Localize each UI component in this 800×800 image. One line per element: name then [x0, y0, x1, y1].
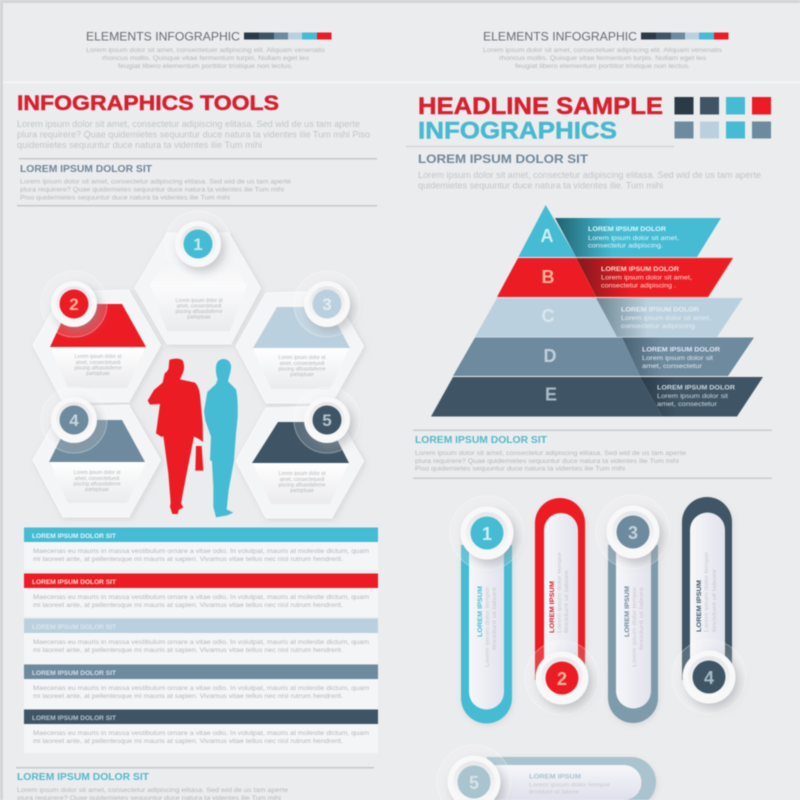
table row 2: Maecenas eu mauris in massa vestibulum ornare a vitae odio. In volutpat, mauris at molestie dictum, quam [33, 594, 369, 601]
intro paragraph left: quidemietes sequuntur duce natura ta videntes ilie Tum mihi [17, 140, 262, 150]
section: bottom left [16, 767, 374, 800]
hexagon 3: piscing alfsasdaferne [279, 366, 326, 372]
tier D [453, 338, 640, 376]
pill 2: Lorem ipsum dolor tempor [557, 552, 563, 633]
header separator [3, 82, 800, 83]
tier D: D [544, 346, 556, 366]
headline right: HEADLINE SAMPLE [418, 93, 663, 120]
hexagon 5: Lorem ipsum dolor at [279, 471, 326, 477]
left header: ELEMENTS INFOGRAPHIC [86, 30, 240, 44]
pill 3: tincidunt ut labore [639, 587, 645, 650]
pill 3: 3 [628, 523, 638, 543]
table row 3: mi laoreet ante, at pellentesque mi mauris at sapien. Vivamus vitae tellus nec nisl rutrum hendrerit. [33, 647, 343, 654]
pill 4 [672, 497, 746, 714]
pill 1: tincidunt ut labore [492, 587, 498, 650]
hexagon 2: partsptuae [86, 371, 110, 377]
hexagon 5: amet, consectetuedi [280, 477, 324, 483]
ribbon D: Lorem ipsum dolor sit [642, 355, 713, 362]
hexagon 4: Lorem ipsum dolor at [74, 470, 121, 476]
pill 4: Lorem ipsum dolor tempor [704, 552, 710, 632]
table row 1: mi laoreet ante, at pellentesque mi mauris at sapien. Vivamus vitae tellus nec nisl rutrum hendrerit. [33, 556, 343, 563]
pill 1 [450, 496, 524, 724]
hexagon 1: partsptuae [187, 314, 211, 320]
colour swatches [674, 97, 771, 138]
tier B [497, 258, 596, 297]
hexagon 5: partsptuae [290, 488, 314, 494]
hexagon 4 [33, 405, 162, 517]
hexagon 1: piscing alfsasdaferne [176, 309, 223, 315]
table row 5: mi laoreet ante, at pellentesque mi mauris at sapien. Vivamus vitae tellus nec nisl rutrum hendrerit. [33, 738, 343, 745]
section: pyramid caption: plura requirere? Quae quidemietes sequuntur duce natura ta videntes ilie Tum mihi [415, 458, 680, 465]
hexagon 4: piscing alfsasdaferne [74, 482, 121, 488]
figure: red man with briefcase [148, 359, 203, 514]
section: intro right: LOREM IPSUM DOLOR SIT [418, 152, 589, 166]
section: lorem ipsum left: Lorem ipsum dolor sit amet, consectetur adipiscing elitasa. Sed wid de us tam aperte [20, 178, 291, 186]
table row 4: LOREM IPSUM DOLOR SIT [32, 670, 116, 677]
ribbon D: LOREM IPSUM DOLOR [642, 346, 720, 354]
tier C [475, 298, 617, 337]
pill 2: LOREM IPSUM [549, 581, 556, 633]
pill 1: Lorem ipsum dolor tempor [485, 587, 491, 667]
badge 2 [41, 271, 107, 337]
ribbon A [555, 218, 721, 257]
table row 1: Maecenas eu mauris in massa vestibulum ornare a vitae odio. In volutpat, mauris at molestie dictum, quam [33, 548, 369, 555]
section: bottom left: LOREM IPSUM DOLOR SIT [17, 772, 149, 783]
right header: ELEMENTS INFOGRAPHIC [483, 30, 637, 44]
left header [86, 30, 332, 70]
hexagon 3: Lorem ipsum dolor at [279, 355, 326, 361]
pill 2: tincidunt ut labore [564, 570, 570, 633]
tier E [431, 377, 662, 416]
ribbon A: LOREM IPSUM DOLOR [588, 226, 666, 233]
table row 5: LOREM IPSUM DOLOR SIT [32, 715, 116, 722]
ribbon D [622, 338, 754, 376]
pill 5: Lorem ipsum dolor tempor [529, 782, 610, 788]
table row 2 [24, 574, 378, 609]
section: pyramid caption: Piso quidemietes sequuntur duce natura ta videntes ilie Tum mihi [415, 466, 626, 472]
badge 5: 5 [322, 411, 332, 430]
headline right: INFOGRAPHICS [418, 118, 617, 144]
table row 4: mi laoreet ante, at pellentesque mi mauris at sapien. Vivamus vitae tellus nec nisl rutrum hendrerit. [33, 693, 343, 700]
tier C: C [542, 306, 554, 326]
table panel backgrounds [24, 542, 378, 753]
table row 1: LOREM IPSUM DOLOR SIT [32, 533, 116, 540]
tier A: A [540, 226, 554, 246]
hexagon 1 [135, 233, 262, 344]
ribbon E: Lorem ipsum dolor sit [657, 393, 728, 400]
tier A [518, 205, 576, 257]
pill 4: LOREM IPSUM [696, 580, 703, 632]
hexagon 5 [236, 406, 365, 518]
pill 1: 1 [482, 524, 492, 544]
hexagon 3 [236, 291, 365, 403]
section: lorem ipsum left: LOREM IPSUM DOLOR SIT [20, 164, 152, 175]
pill 4: 4 [704, 668, 714, 688]
pill 3: Lorem ipsum dolor tempor [632, 587, 638, 667]
pyramid [431, 205, 763, 416]
section: bottom left: Lorem ipsum dolor sit amet, consectetur adipiscing elitasa. Sed wid de us tam aperte [17, 787, 288, 794]
pill 2: 2 [557, 669, 567, 689]
badge 3: 3 [322, 295, 332, 314]
badge 1: 1 [193, 235, 203, 254]
ribbon B: Lorem ipsum dolor sit amet, [601, 274, 692, 282]
ribbon A: Lorem ipsum dolor sit amet, [588, 235, 679, 242]
right header: feugiat libero elementum porttitor tristique non lectus. [515, 63, 690, 70]
badge 3 [294, 271, 360, 337]
intro paragraph left [17, 119, 370, 150]
section: intro right: quidemietes sequuntur duce natura ta videntes ilie. Tum mihi [418, 180, 663, 190]
section: intro right [406, 146, 761, 190]
section: lorem ipsum left: Piso quidemietes sequuntur duce natura ta videntes ilie Tum mihi [20, 194, 231, 202]
ribbon C: Lorem ipsum dolor sit amet, [621, 315, 711, 322]
ribbon B: consectetur adipiscing . [601, 282, 676, 290]
pill 5: tincidunt ut labore [529, 790, 579, 796]
ribbon B [576, 258, 733, 297]
table row 2: mi laoreet ante, at pellentesque mi mauris at sapien. Vivamus vitae tellus nec nisl rutrum hendrerit. [33, 602, 343, 609]
hexagon 2: piscing alfsasdaferne [75, 366, 122, 372]
table row 3: LOREM IPSUM DOLOR SIT [32, 624, 116, 631]
hexagon 1: Lorem ipsum dolor at [176, 298, 223, 304]
right header: rhoncus mollis. Quisque vitae fermentum turpis. Nullam eget leo [499, 55, 707, 62]
section: pyramid caption: LOREM IPSUM DOLOR SIT [415, 435, 547, 446]
pill 5 [437, 745, 656, 800]
badge 4: 4 [69, 411, 79, 430]
ribbon D: amet, consectetur [642, 363, 703, 370]
ribbon E [640, 377, 763, 416]
pill 5: 5 [469, 773, 479, 793]
section: pyramid caption: Lorem ipsum dolor sit amet, consectetur adipiscing elitasa. Sed wid de us tam aperte [415, 450, 686, 457]
right header: Lorem ipsum dolor sit amet, consectetuer adipiscing elit. Aliquam venenatis [483, 47, 722, 54]
pill 3: LOREM IPSUM [624, 586, 631, 637]
tier E: E [545, 384, 557, 404]
table row 5: Maecenas eu mauris in massa vestibulum ornare a vitae odio. In volutpat, mauris at molestie dictum, quam [33, 730, 369, 737]
ribbon C: LOREM IPSUM DOLOR [621, 306, 699, 314]
badge 5 [294, 387, 360, 453]
table row 5 [24, 710, 378, 745]
ribbon B: LOREM IPSUM DOLOR [601, 266, 679, 273]
badge 1 [165, 211, 231, 277]
table row 3: Maecenas eu mauris in massa vestibulum ornare a vitae odio. In volutpat, mauris at molestie dictum, quam [33, 639, 369, 646]
intro paragraph left: Lorem ipsum dolor sit amet, consectetur adipiscing elitasa. Sed wid de us tam aperte [17, 119, 360, 129]
pill 1: LOREM IPSUM [477, 586, 484, 637]
hexagon 2: amet, consectetuedi [76, 360, 120, 366]
left header: Lorem ipsum dolor sit amet, consectetuer adipiscing elit. Aliquam venenatis [86, 47, 325, 54]
badge 2: 2 [69, 295, 79, 314]
hexagon 5: piscing alfsasdaferne [279, 482, 326, 488]
title: infographics tools: INFOGRAPHICS TOOLS [17, 92, 279, 115]
section: lorem ipsum left: plura requirere? Quae quidemietes sequuntur duce natura ta videntes ilie Tum mihi [20, 186, 285, 194]
figure: blue woman [204, 359, 238, 517]
hexagon 3: amet, consectetuedi [280, 361, 324, 367]
pill 3 [596, 495, 670, 723]
pill 5: LOREM IPSUM [529, 774, 581, 780]
ribbon C: consectetur adipiscing [621, 323, 695, 330]
hexagon 3: partsptuae [290, 372, 314, 378]
ribbon A: consectetur adipiscing. [588, 242, 663, 250]
right header [483, 30, 728, 70]
left header: rhoncus mollis. Quisque vitae fermentum turpis. Nullam eget leo [102, 55, 310, 62]
ribbon E: LOREM IPSUM DOLOR [657, 384, 735, 392]
table row 2: LOREM IPSUM DOLOR SIT [32, 579, 116, 586]
table row 4 [24, 664, 378, 700]
headline right [418, 93, 663, 144]
pill 4: tincidunt ut labore [712, 569, 718, 632]
section: pyramid caption [413, 430, 772, 479]
table row 1 [24, 528, 378, 563]
ribbon E: amet, consectetur [657, 401, 718, 408]
hexagon 1: amet, consectetuedi [177, 304, 221, 310]
section: lorem ipsum left [17, 158, 377, 206]
tier B: B [542, 267, 554, 287]
ribbon C [596, 298, 743, 337]
table row 4: Maecenas eu mauris in massa vestibulum ornare a vitae odio. In volutpat, mauris at molestie dictum, quam [33, 685, 369, 692]
hexagon 2 [33, 290, 162, 402]
table row 3 [24, 618, 378, 654]
hexagon 2: Lorem ipsum dolor at [75, 354, 122, 360]
pill 2 [525, 498, 599, 715]
hexagon 4: amet, consectetuedi [75, 476, 119, 482]
hexagon 4: partsptuae [85, 487, 109, 493]
intro paragraph left: plura requirere? Quae quidemietes sequuntur duce natura ta videntes ilie Tum mihi Piso [17, 130, 370, 140]
badge 4 [41, 387, 107, 453]
left header: feugiat libero elementum porttitor tristique non lectus. [118, 63, 293, 70]
section: intro right: Lorem ipsum dolor sit amet, consectetur adipiscing elitasa. Sed wid de us tam aperte [418, 170, 761, 180]
